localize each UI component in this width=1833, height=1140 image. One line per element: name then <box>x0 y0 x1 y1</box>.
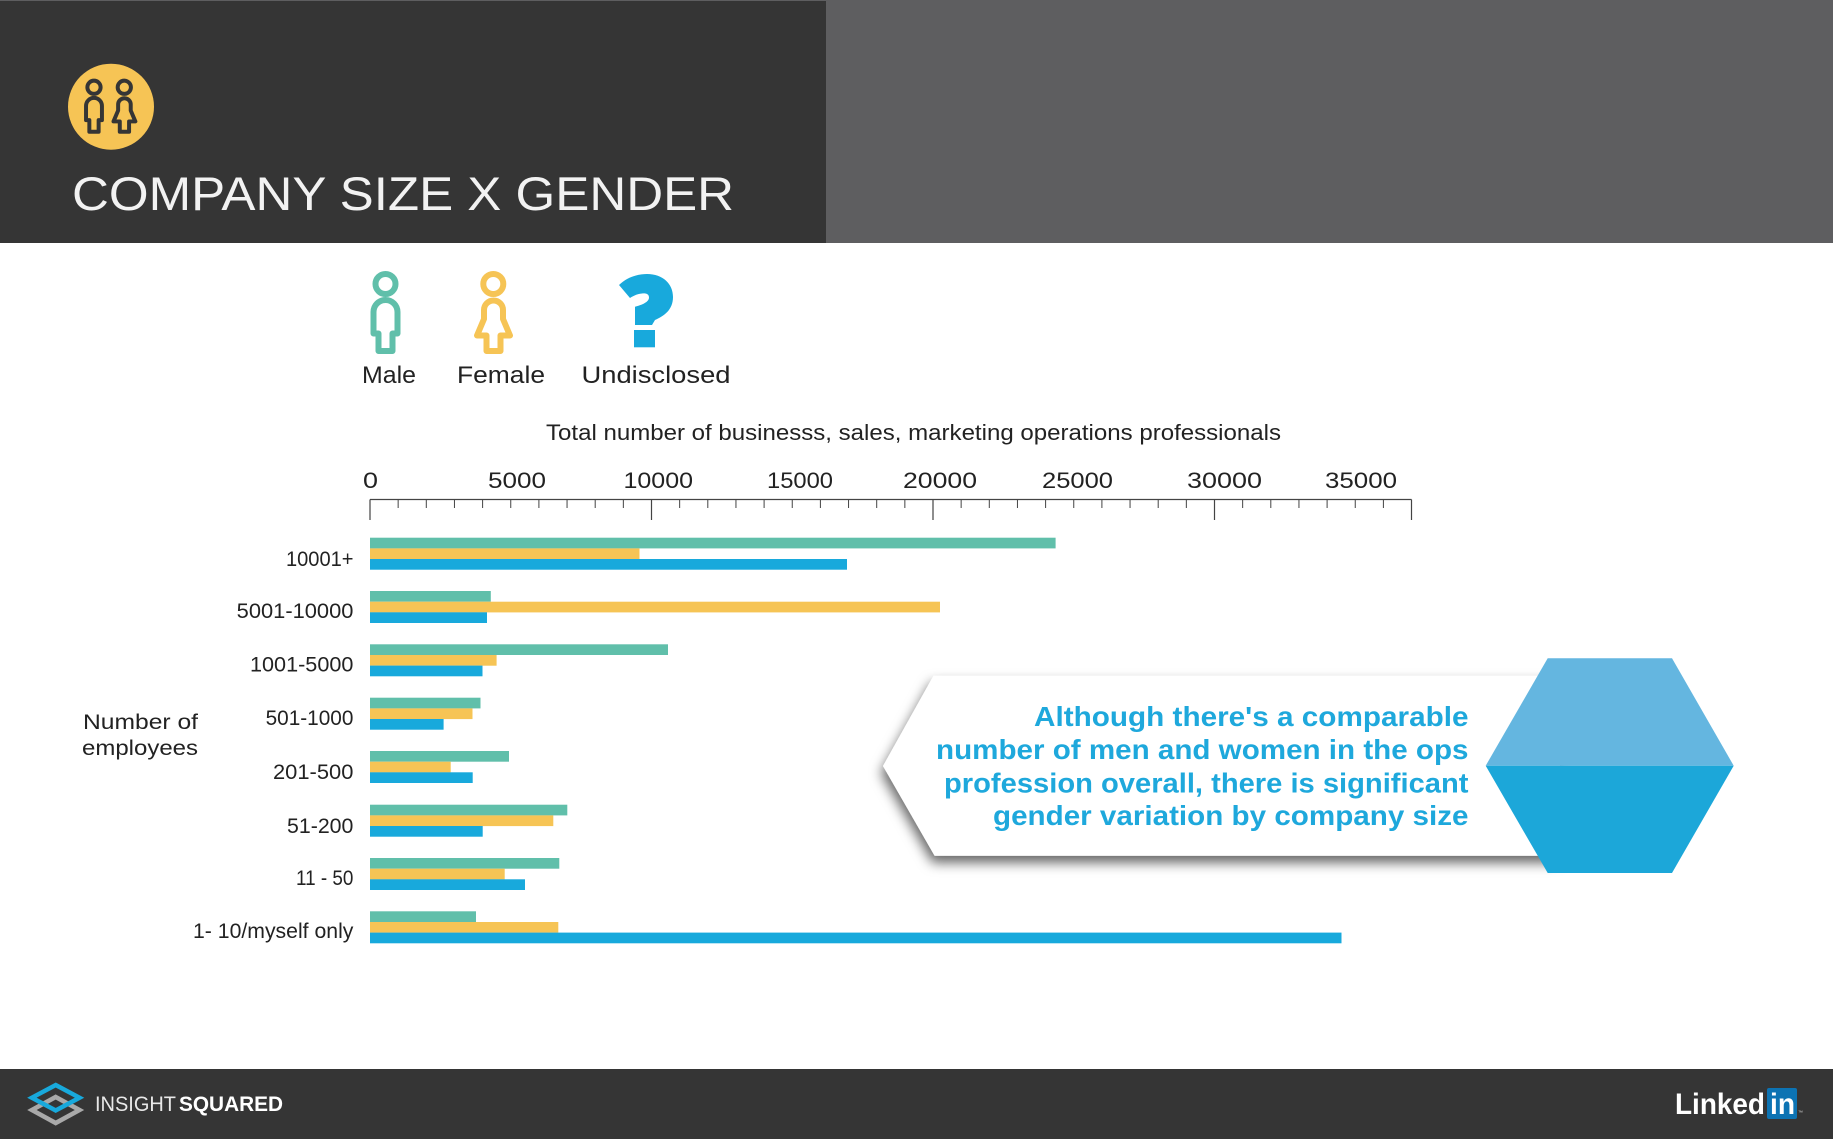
row: 51-200: 51-200 <box>287 815 353 838</box>
axis tick labels: 5000 <box>488 468 546 493</box>
row: 1- 10/myself only: 1- 10/myself only <box>193 920 354 943</box>
title: COMPANY SIZE X GENDER <box>72 167 734 220</box>
row: 1001-5000 <box>250 644 668 677</box>
icon: female <box>477 274 510 351</box>
icon: male <box>374 274 398 351</box>
y axis title: Number of <box>83 711 198 734</box>
axis tick labels: 30000 <box>1187 468 1262 493</box>
logo: linkedin: in <box>1770 1088 1795 1121</box>
logo: linkedin: ™ <box>1798 1110 1803 1116</box>
axis tick labels: 35000 <box>1325 468 1397 493</box>
logo: linkedin: Linked <box>1675 1088 1765 1121</box>
axis tick labels: 25000 <box>1042 468 1113 493</box>
icon: people in yellow circle <box>68 64 154 150</box>
axis tick labels: 20000 <box>903 468 977 493</box>
row: 201-500 <box>273 751 509 784</box>
hexagon <box>1486 658 1734 873</box>
legend <box>362 274 730 389</box>
row: 1001-5000: 1001-5000 <box>250 654 353 677</box>
footer <box>0 1069 1833 1139</box>
row: 501-1000: 501-1000 <box>266 707 353 730</box>
callout text <box>936 701 1468 831</box>
axis tick labels: 10000 <box>624 468 693 493</box>
axis tick labels: 15000 <box>767 468 833 493</box>
y axis title <box>82 711 198 760</box>
y axis title: employees <box>82 737 198 760</box>
icon: question mark <box>619 274 673 347</box>
callout <box>883 658 1734 873</box>
row: 1- 10/myself only <box>193 911 1342 943</box>
logo: insightsquared <box>32 1085 283 1123</box>
logo: insightsquared: SQUARED <box>179 1093 283 1116</box>
row: 10001+: 10001+ <box>286 548 354 571</box>
axis scale <box>363 468 1412 520</box>
row: 501-1000 <box>266 698 480 730</box>
bar chart <box>193 538 1342 943</box>
callout text: gender variation by company size <box>993 800 1468 831</box>
logo: insightsquared: INSIGHT <box>95 1093 176 1116</box>
row: 10001+ <box>286 538 1056 571</box>
row: 51-200 <box>287 805 567 838</box>
axis tick labels <box>363 468 1397 493</box>
legend label: male: Male <box>362 362 416 389</box>
callout text: number of men and women in the ops <box>936 734 1468 765</box>
row: 201-500: 201-500 <box>273 761 353 784</box>
row: 5001-10000: 5001-10000 <box>237 600 353 623</box>
callout arrow panel <box>883 676 1560 856</box>
row: 11 - 50 <box>296 858 559 890</box>
callout text: Although there's a comparable <box>1034 701 1468 732</box>
row: 11 - 50: 11 - 50 <box>296 867 353 890</box>
header banner <box>0 0 1833 243</box>
row: 5001-10000 <box>237 591 940 623</box>
legend label: undisclosed: Undisclosed <box>582 362 730 389</box>
axis tick labels: 0 <box>363 468 378 493</box>
legend label: female: Female <box>457 362 545 389</box>
callout text: profession overall, there is significant <box>944 768 1468 799</box>
axis title: Total number of businesss, sales, marketing operations professionals <box>546 420 1281 445</box>
